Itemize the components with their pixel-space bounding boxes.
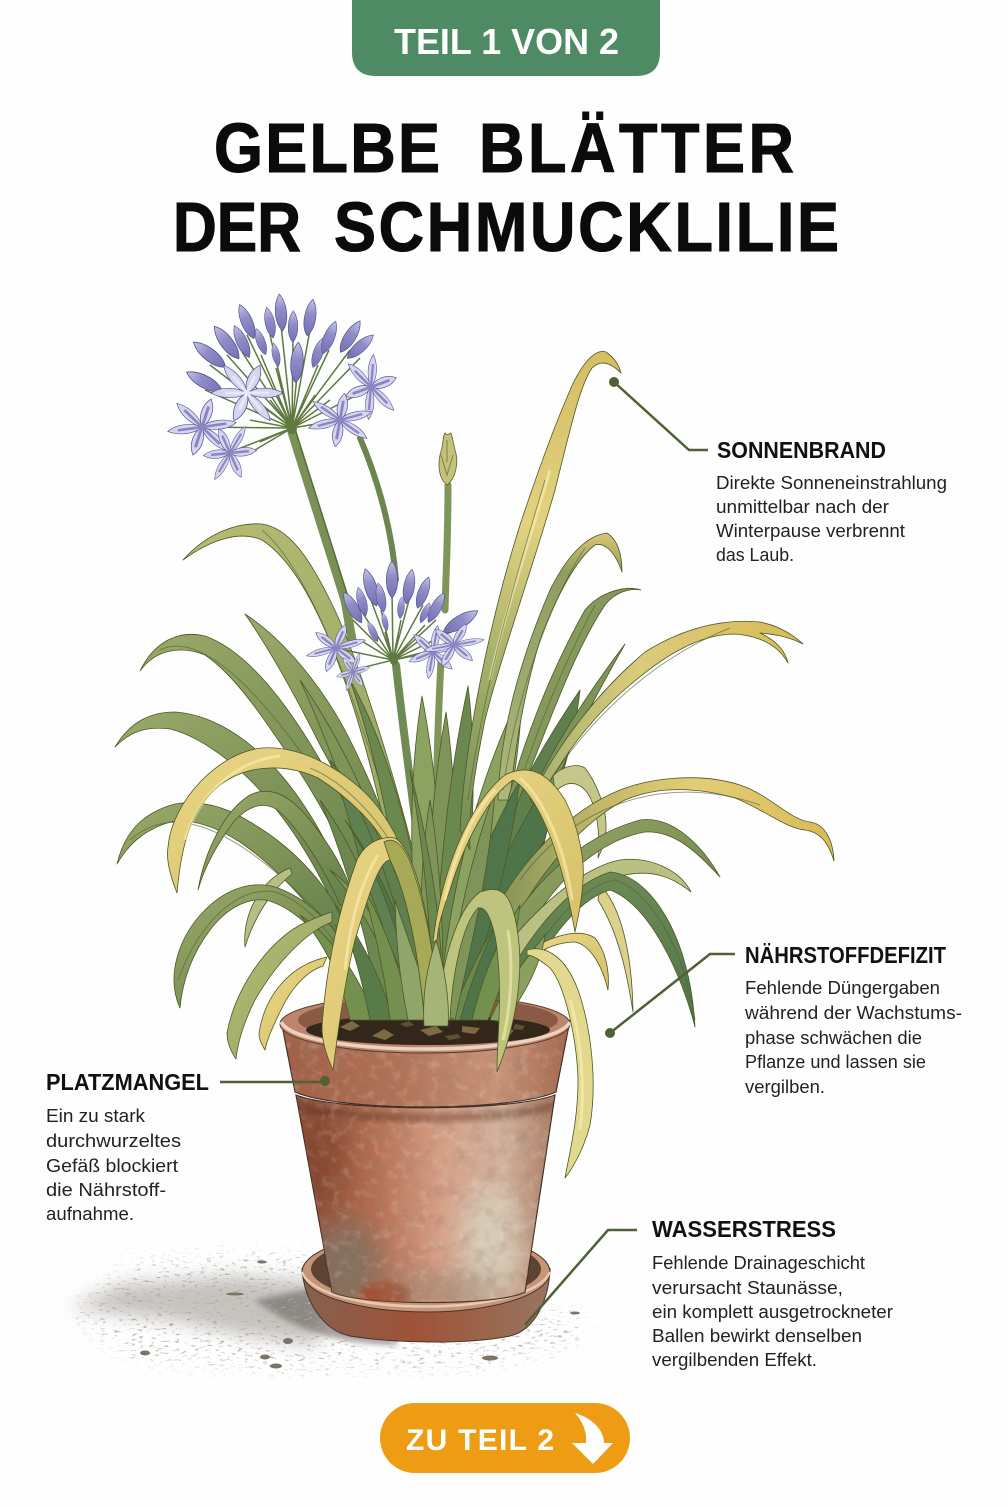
hanging yellow front leaf [322, 838, 440, 1070]
callout: Wasserstress: ein komplett ausgetrockneter [652, 1301, 893, 1322]
callout: Platzmangel [46, 1069, 330, 1224]
callout: Platzmangel: Gefäß blockiert [46, 1155, 178, 1176]
callout: Platzmangel: durchwurzeltes [46, 1130, 181, 1151]
callout: Nährstoffdefizit: Fehlende Düngergaben [745, 977, 940, 998]
terracotta pot with saucer [280, 995, 572, 1342]
title: SCHMUCKLILIE [334, 189, 839, 267]
button: Zu Teil 2 [380, 1403, 630, 1473]
flower stalks [292, 432, 448, 840]
ground shadow and soil specks [70, 1250, 590, 1372]
arching yellow centre-right leaf [433, 770, 583, 943]
callout: Sonnenbrand: das Laub. [716, 544, 794, 565]
callout: Wasserstress: WASSERSTRESS [652, 1216, 836, 1242]
title: DER [173, 189, 301, 267]
pot rim [280, 995, 572, 1115]
callout: Wasserstress [525, 1216, 893, 1370]
icon: curved down arrow [572, 1413, 613, 1464]
long yellow right leaf [490, 778, 834, 930]
base of central leaves [424, 940, 448, 1026]
long pale hanging leaf [527, 949, 593, 1178]
title [173, 110, 839, 267]
callout: Platzmangel: PLATZMANGEL [46, 1069, 209, 1095]
callout: Sonnenbrand: unmittelbar nach der [716, 496, 889, 517]
callout: Sonnenbrand [609, 377, 947, 565]
callout: Platzmangel: aufnahme. [46, 1203, 134, 1224]
flower bud on stalk [439, 433, 457, 485]
callout: Nährstoffdefizit: vergilben. [745, 1076, 825, 1097]
callout: Wasserstress: vergilbenden Effekt. [652, 1349, 817, 1370]
callout: Nährstoffdefizit: während der Wachstums- [744, 1002, 962, 1023]
callout: Sonnenbrand: Winterpause verbrennt [716, 520, 905, 541]
button: Zu Teil 2: ZU TEIL 2 [406, 1424, 554, 1457]
leaves: front yellow layer [167, 748, 593, 1178]
callout: Nährstoffdefizit [605, 942, 962, 1097]
soil [306, 1015, 550, 1045]
pot body [290, 1090, 560, 1310]
sunburnt tall leaf [460, 351, 621, 850]
callout: Nährstoffdefizit: NÄHRSTOFFDEFIZIT [745, 942, 946, 968]
pale arching leaf [437, 889, 520, 1072]
callout: Sonnenbrand: Direkte Sonneneinstrahlung [716, 472, 947, 493]
header banner: Teil 1 von 2 [352, 0, 660, 76]
header banner: Teil 1 von 2: TEIL 1 VON 2 [394, 21, 619, 62]
callout: Nährstoffdefizit: phase schwächen die [745, 1027, 922, 1048]
callout: Wasserstress: Ballen bewirkt denselben [652, 1325, 862, 1346]
callout: Wasserstress: verursacht Staunässe, [652, 1277, 843, 1298]
umbel: upper flower head [161, 294, 407, 491]
leaves: back layer [115, 351, 803, 1020]
callout: Platzmangel: die Nährstoff- [46, 1179, 166, 1200]
callout: Wasserstress: Fehlende Drainageschicht [652, 1252, 865, 1273]
umbel: lower flower head [301, 561, 488, 696]
title: BLÄTTER [479, 110, 794, 188]
saucer [302, 1232, 550, 1342]
leaves: middle layer [300, 770, 834, 1027]
title: GELBE [214, 110, 440, 188]
callout: Platzmangel: Ein zu stark [46, 1105, 146, 1126]
callout: Nährstoffdefizit: Pflanze und lassen sie [745, 1051, 926, 1072]
callout: Sonnenbrand: SONNENBRAND [717, 437, 886, 463]
